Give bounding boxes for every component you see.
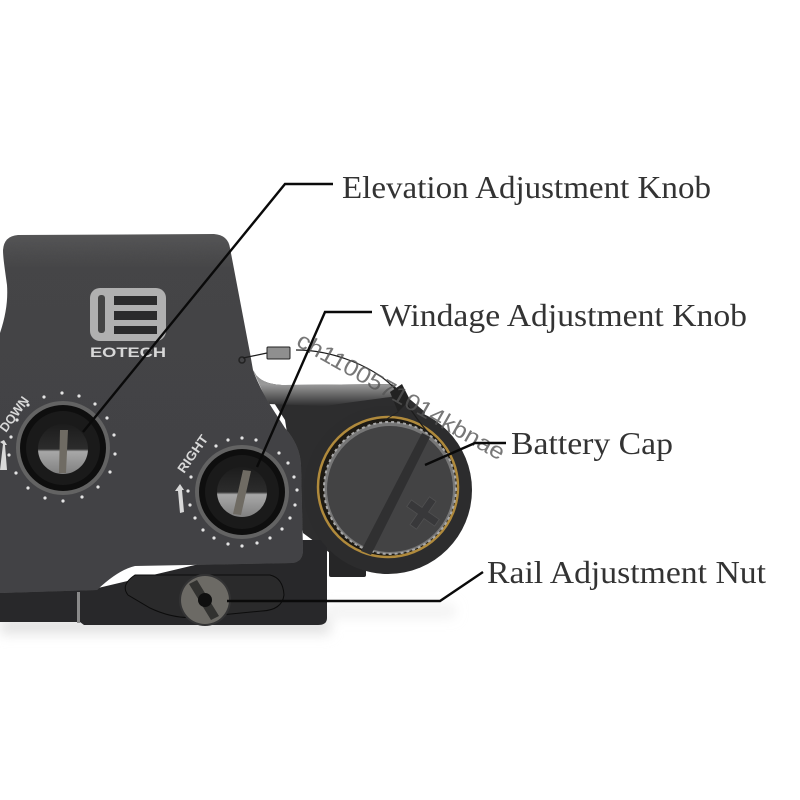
watermark: ch1100571014kbnae [293,327,510,465]
rail clamp [329,550,366,577]
leader: battery cap [425,443,506,465]
label: rail nut: Rail Adjustment Nut [487,554,766,590]
EOTECH wordmark: EOTECH [90,345,166,360]
battery housing [253,370,425,574]
windage knob [174,432,299,548]
label: battery cap: Battery Cap [511,425,673,461]
elevation knob [0,391,117,503]
leader: rail nut [227,572,483,601]
windage knob dial dots [186,436,299,548]
label: elevation: Elevation Adjustment Knob [342,169,711,205]
elevation knob dial dots [7,391,117,503]
main body [0,234,303,593]
lower rail [0,540,327,625]
leader: windage [257,312,372,467]
rail adjustment nut [125,574,284,626]
ground shadow [0,604,455,634]
right arrow [175,484,184,513]
sight housing [0,234,425,625]
EOTech logo [90,288,166,360]
leader: elevation [83,184,333,432]
battery cap [304,406,472,574]
label: windage: Windage Adjustment Knob [380,297,747,333]
down arrow [0,440,7,470]
cap slot [361,433,430,555]
safety wire [239,347,428,432]
RIGHT label: RIGHT [174,432,211,476]
plus mark [399,489,447,537]
